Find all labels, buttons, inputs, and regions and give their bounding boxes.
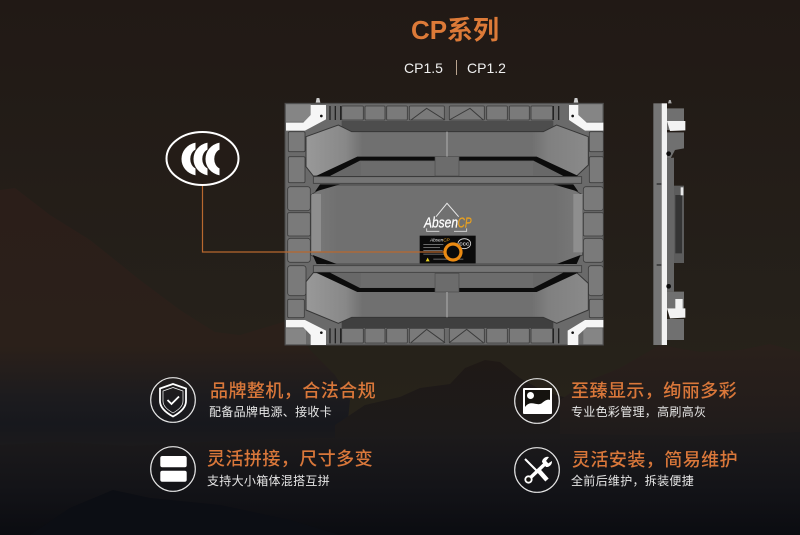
model subtitle: CP1.5 xyxy=(404,60,443,76)
heading: 灵活拼接，尺寸多变 xyxy=(207,449,373,469)
text: 全前后维护，拆装便捷 xyxy=(571,474,694,488)
Absen CP logo xyxy=(423,203,472,231)
product label: CCC xyxy=(459,242,470,247)
feature: display quality xyxy=(514,378,737,424)
cabinet frame xyxy=(285,103,603,345)
feature: flexible splicing xyxy=(150,446,373,492)
model subtitle xyxy=(404,60,506,76)
icon: picture xyxy=(514,378,560,424)
text: 配备品牌电源、接收卡 xyxy=(209,405,332,419)
icon: tools xyxy=(514,447,560,493)
centre module xyxy=(311,184,583,264)
heading: 品牌整机，合法合规 xyxy=(210,381,376,401)
text: 支持大小箱体混搭互拼 xyxy=(207,474,330,488)
Absen CP logo: Absen xyxy=(423,215,458,231)
text: 专业色彩管理，高刷高灰 xyxy=(571,405,706,419)
icon: shield xyxy=(150,377,196,423)
Absen CP logo: CP xyxy=(458,215,472,231)
heading: 至臻显示，绚丽多彩 xyxy=(571,381,737,401)
lower module xyxy=(306,266,588,328)
product label: AbsenCP xyxy=(429,237,451,242)
feature: brand and compliance xyxy=(150,377,376,423)
upper module xyxy=(306,121,588,183)
white corner brackets xyxy=(286,98,603,345)
icon: stacked panels xyxy=(150,446,196,492)
model subtitle: CP1.2 xyxy=(467,60,506,76)
product label xyxy=(420,236,476,263)
heading: 灵活安装，简易维护 xyxy=(572,450,738,470)
title: CP系列 xyxy=(411,15,499,45)
feature: easy installation xyxy=(514,447,738,493)
